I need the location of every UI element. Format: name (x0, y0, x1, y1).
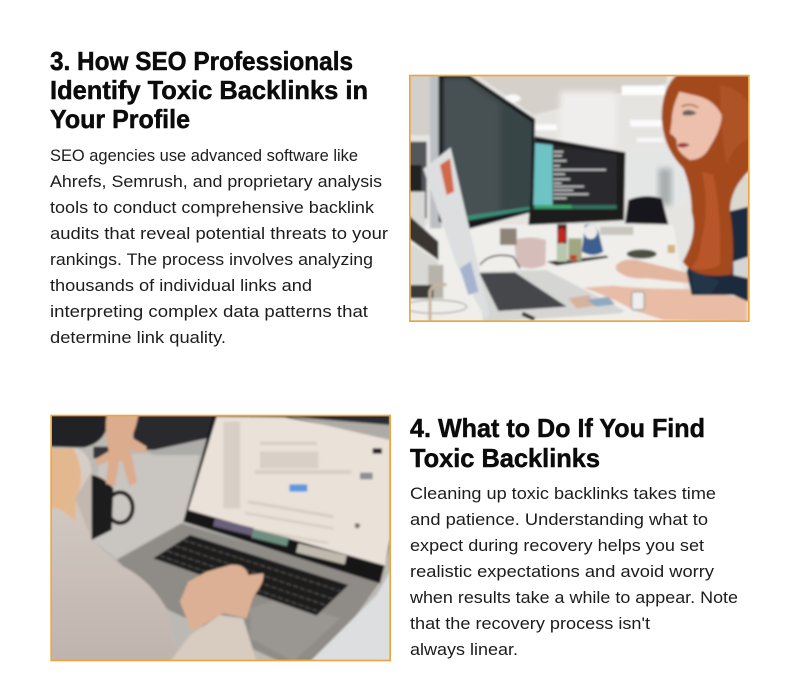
hair back (662, 75, 750, 276)
section 4 body text: always linear. (410, 641, 518, 659)
sweater body (52, 448, 167, 614)
section 3 body text: audits that reveal potential threats to your (50, 225, 389, 243)
black chair (625, 196, 668, 224)
section 4 heading: Toxic Backlinks (410, 443, 600, 473)
section 3 body text: Ahrefs, Semrush, and proprietary analysis (50, 173, 382, 191)
section 4 body text: Cleaning up toxic backlinks takes time (410, 485, 716, 503)
monitor 2 (528, 136, 625, 225)
section 4 heading (410, 413, 705, 473)
section 3 body text: interpreting complex data patterns that (50, 303, 368, 321)
laptop lid (423, 147, 489, 320)
screen (188, 417, 390, 566)
section 4 heading: 4. What to Do If You Find (410, 413, 705, 443)
laptop screen bezel (183, 415, 390, 583)
dock icons (213, 518, 347, 564)
section 3 body text: thousands of individual links and (50, 277, 312, 295)
monitor 1 (439, 75, 535, 229)
section 4 body text: that the recovery process isn't (410, 615, 650, 633)
keyboard (153, 535, 348, 616)
laptop base (117, 523, 380, 662)
monitor 1 stand strip (430, 75, 442, 228)
section 4 body text (409, 485, 738, 659)
photo: person typing on laptop (50, 414, 391, 662)
face (670, 92, 722, 160)
section 4 body text: and patience. Understanding what to (410, 511, 708, 529)
section 4 body text: realistic expectations and avoid worry (410, 563, 715, 581)
typing hand (180, 565, 264, 632)
section 4 body text: expect during recovery helps you set (410, 537, 704, 555)
laptop base (477, 270, 625, 322)
section 3 body text: determine link quality. (50, 329, 226, 347)
section 3 body text: SEO agencies use advanced software like (50, 147, 358, 165)
desk (407, 225, 690, 325)
section 3 body text: rankings. The process involves analyzing (50, 251, 373, 269)
raised hand (95, 415, 147, 487)
section 3 heading: Identify Toxic Backlinks in (50, 75, 368, 105)
section 3 body text (50, 147, 389, 347)
hair (48, 413, 108, 448)
left clutter (408, 142, 427, 218)
arm and hand (616, 259, 690, 283)
laptop right edge (310, 568, 392, 662)
desk items (547, 256, 608, 266)
section 3 heading (50, 46, 368, 134)
forearm sleeve (170, 615, 257, 662)
section 3 heading: Your Profile (50, 104, 190, 134)
mug (92, 475, 113, 540)
shirt (687, 177, 748, 302)
section 4 body text: when results take a while to appear. Note (409, 589, 738, 607)
section 3 body text: tools to conduct comprehensive backlink (50, 199, 375, 217)
section 3 heading: 3. How SEO Professionals (50, 46, 353, 76)
photo: woman working at monitors (409, 74, 750, 322)
